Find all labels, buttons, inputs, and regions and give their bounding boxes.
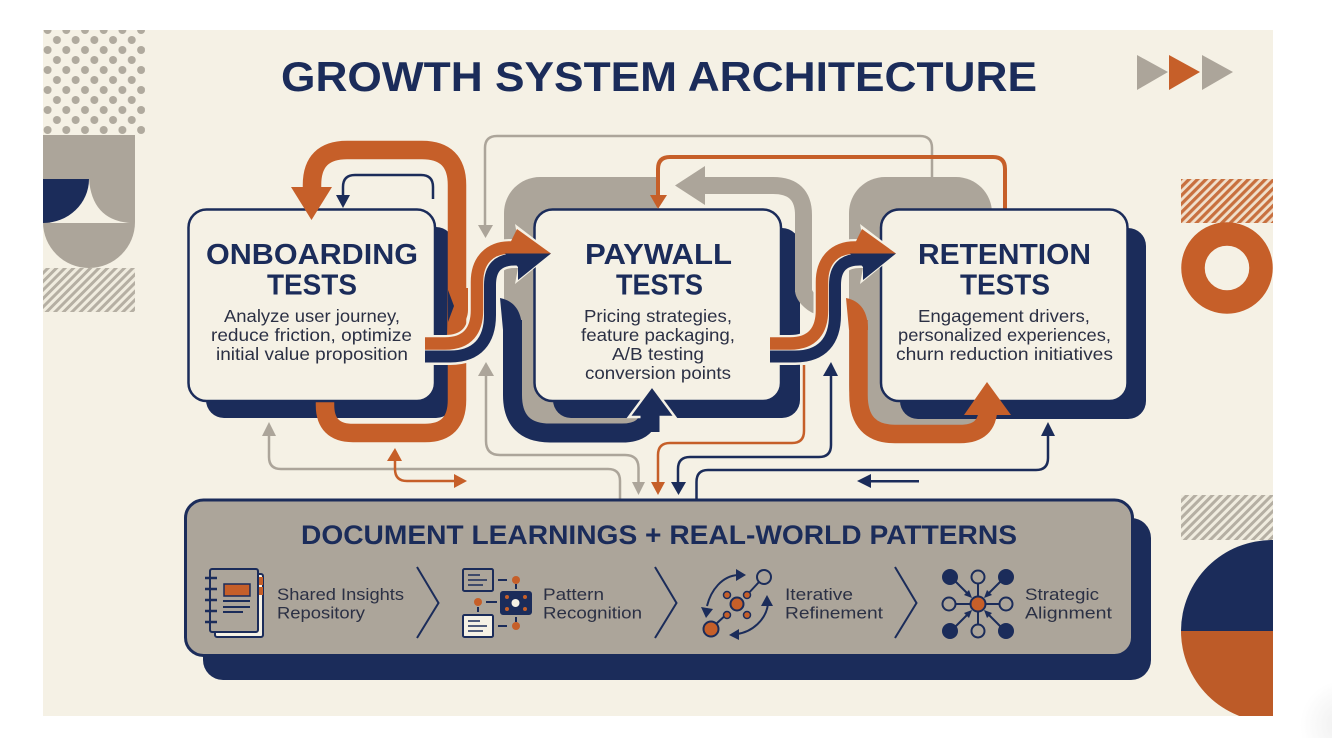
icon: notebook (205, 569, 263, 637)
arrowhead: onboarding orange (291, 187, 332, 220)
panel: paywall shadow (553, 228, 800, 418)
arrowhead: paywall navy (629, 386, 675, 432)
step text: iterative refinement: Iterative (785, 585, 853, 604)
card: retention tests (881, 210, 1128, 401)
arrowhead: retention orange (964, 382, 1011, 415)
step text: shared insights (277, 585, 404, 622)
decoration: right geometric column top (1181, 179, 1273, 302)
arrow: paywall to retention (770, 224, 898, 356)
decoration: right geometric column bottom (1181, 495, 1273, 722)
panel: retention shadow (900, 228, 1146, 419)
thin arrow: gray top feedback (478, 136, 932, 238)
thin arrow: gray paywall up and down (478, 362, 645, 495)
panel: document learnings (186, 500, 1151, 680)
thin arrow: navy double (671, 362, 838, 495)
card: paywall tests: Pricing strategies, (584, 306, 732, 326)
card: paywall tests: PAYWALL (585, 239, 732, 271)
panel heading: DOCUMENT LEARNINGS + REAL-WORLD PATTERNS (301, 520, 1017, 550)
card: paywall tests: TESTS (616, 270, 703, 302)
card: paywall tests (534, 210, 781, 401)
step text: strategic alignment: Alignment (1025, 604, 1112, 622)
thin arrow: navy to retention (696, 422, 1055, 499)
card: onboarding tests: Analyze user journey, (224, 306, 400, 326)
card: onboarding tests: reduce friction, optimize (211, 325, 412, 345)
icon: three arrows (1137, 55, 1233, 90)
icon: iterative refinement (701, 569, 773, 640)
chevron 3 (895, 567, 916, 638)
step text: pattern recognition (543, 585, 642, 622)
card: onboarding tests: initial value proposition (216, 344, 408, 364)
step text: shared insights: Repository (277, 604, 366, 622)
step text: pattern recognition: Pattern (543, 585, 604, 604)
thin arrow: orange to bottom (651, 365, 804, 495)
card: onboarding tests (188, 210, 435, 401)
arrow: onboarding orange loop back (312, 150, 468, 433)
icon: pattern recognition (463, 569, 531, 637)
step text: shared insights: Shared Insights (277, 585, 404, 604)
chevron 2 (655, 567, 676, 638)
card: onboarding tests: ONBOARDING (206, 239, 418, 271)
panel: onboarding shadow (206, 227, 454, 418)
arrow: retention orange loop (846, 298, 988, 434)
step text: strategic alignment (1025, 585, 1112, 622)
card: paywall tests: feature packaging, (581, 325, 735, 345)
thin arrow: gray to onboarding (262, 422, 620, 499)
card: retention tests: RETENTION (918, 239, 1091, 271)
corner vignette (1300, 680, 1332, 738)
step text: strategic alignment: Strategic (1025, 585, 1100, 604)
card: onboarding tests: TESTS (267, 270, 357, 302)
card: retention tests: personalized experiences, (898, 325, 1111, 345)
arrow: paywall navy loop (500, 298, 650, 433)
panel: retention gray loop (849, 177, 992, 425)
arrow: onboarding to paywall (425, 224, 553, 356)
arrow: gray loop paywall (675, 166, 815, 314)
thin arrow: orange top feedback (650, 157, 1005, 212)
decoration: left geometric column (43, 30, 145, 312)
card: retention tests: TESTS (960, 270, 1050, 302)
icon: strategic alignment (942, 570, 1013, 638)
card: retention tests: churn reduction initiatives (896, 344, 1113, 364)
chevron 1 (417, 567, 438, 638)
small navy arrow (857, 474, 919, 488)
panel: paywall gray loop (504, 177, 657, 425)
card: retention tests: Engagement drivers, (918, 306, 1090, 326)
small orange arrow (387, 448, 467, 488)
card: paywall tests: A/B testing (612, 344, 704, 364)
step text: iterative refinement (785, 585, 883, 622)
title: GROWTH SYSTEM ARCHITECTURE (281, 53, 1037, 100)
arrow: onboarding navy small loop (336, 175, 433, 208)
card: paywall tests: conversion points (585, 363, 731, 383)
step text: pattern recognition: Recognition (543, 604, 642, 622)
step text: iterative refinement: Refinement (785, 604, 883, 622)
